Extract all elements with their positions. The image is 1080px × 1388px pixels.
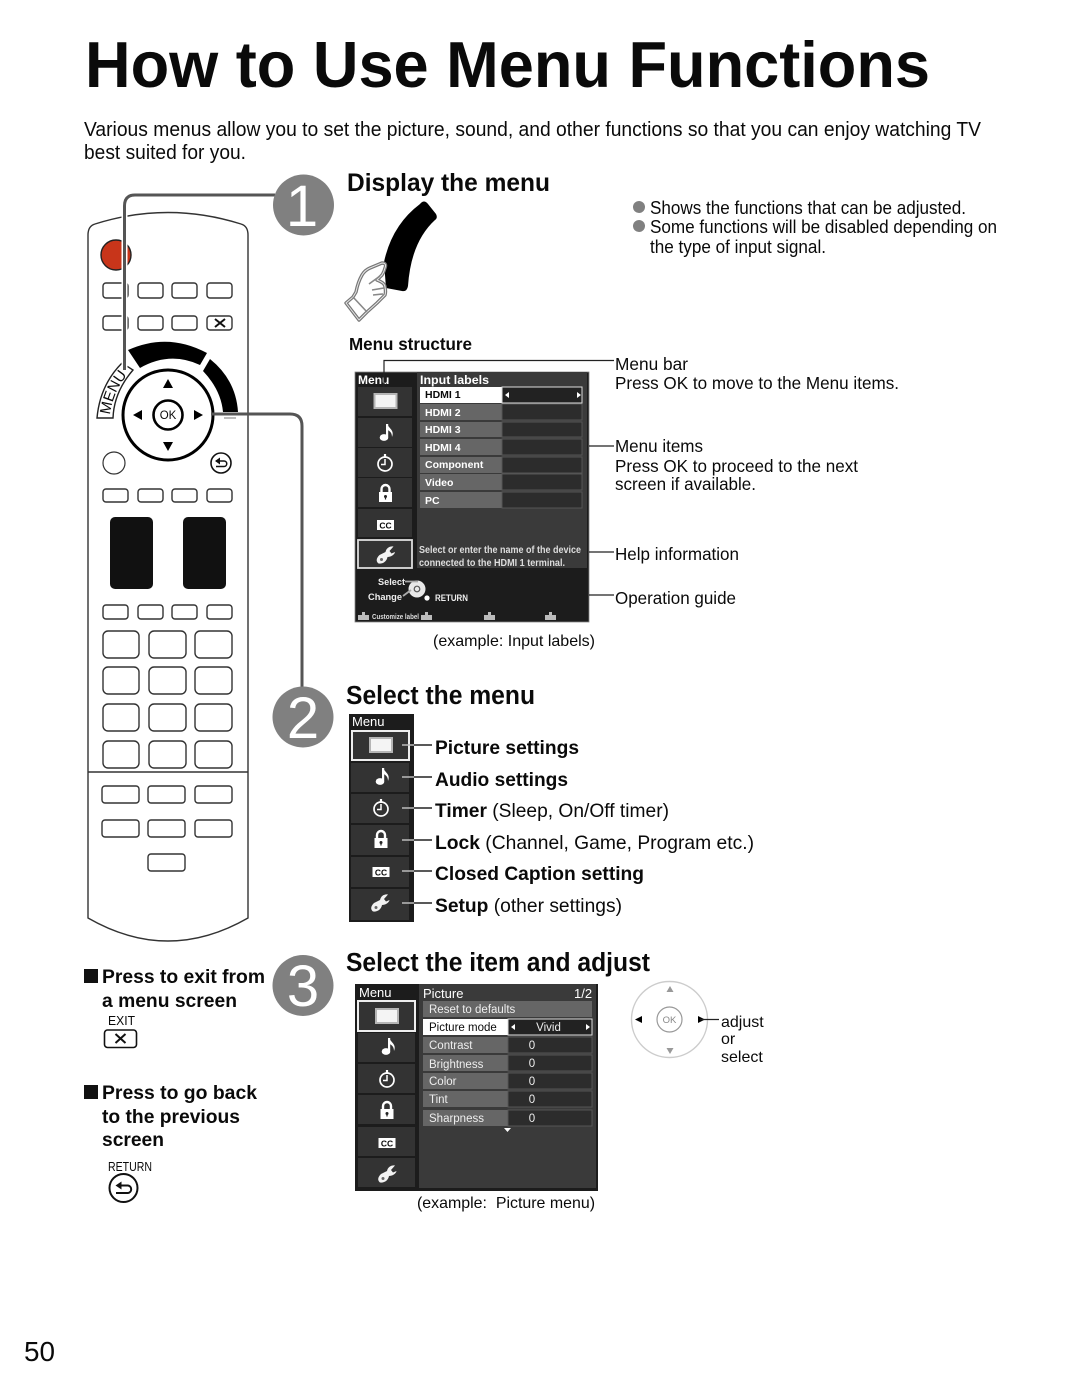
screen labels: Select or enter the name of the device <box>419 545 581 556</box>
leader lines <box>384 360 614 595</box>
exit note: a menu screen <box>102 990 237 1012</box>
operation guide icons <box>358 580 556 620</box>
menu label: MENU <box>100 370 125 414</box>
menu bar label: Press OK to move to the Menu items. <box>615 373 899 393</box>
help information label: Help information <box>615 544 739 564</box>
picture menu rows: Reset to defaults <box>429 1004 516 1016</box>
menu screen: picture <box>355 984 598 1191</box>
title: How to Use Menu Functions <box>85 28 930 101</box>
picture menu rows: 0 <box>529 1076 535 1088</box>
menu bar label <box>615 354 899 393</box>
screen labels: Change <box>368 592 402 603</box>
input rows: HDMI 3 <box>425 424 461 436</box>
arrow: step 1 to menu button <box>124 195 275 370</box>
intro text <box>84 119 982 164</box>
page number: 50 <box>24 1336 55 1367</box>
exit note <box>84 966 265 1048</box>
remote control <box>87 212 249 942</box>
picture menu rows: 0 <box>529 1113 535 1125</box>
picture menu header <box>359 985 592 1001</box>
menu bar icons: CC <box>379 520 392 530</box>
return note: to the previous <box>102 1106 240 1128</box>
icon: exit button <box>104 1030 136 1048</box>
picture menu rows: Tint <box>429 1094 449 1106</box>
picture menu rows: Sharpness <box>429 1113 484 1125</box>
picture menu header: Picture <box>423 986 463 1001</box>
input rows: Component <box>425 459 484 471</box>
remote body <box>88 212 248 941</box>
top buttons <box>103 283 232 330</box>
icon: return button <box>110 1174 138 1202</box>
return button <box>211 453 231 473</box>
adjust or select label <box>721 1014 764 1066</box>
picture menu rows: 0 <box>529 1040 535 1052</box>
step 3 badge <box>272 954 334 1019</box>
black arc buttons <box>128 342 238 412</box>
menu items label: screen if available. <box>615 474 756 494</box>
menu bar label: Menu bar <box>615 354 688 374</box>
picture menu rows: 0 <box>529 1058 535 1070</box>
screen labels <box>358 373 581 621</box>
return note: screen <box>102 1129 164 1151</box>
menu bar strip: Menu <box>352 714 385 729</box>
menu category list: Lock (Channel, Game, Program etc.) <box>435 832 754 854</box>
picture menu rows: Picture mode <box>429 1022 497 1034</box>
menu category leaders <box>402 745 432 903</box>
input rows: Video <box>425 477 453 489</box>
input rows: HDMI 1 <box>425 389 461 401</box>
return note: Press to go back <box>102 1082 257 1104</box>
menu category list: Audio settings <box>435 769 568 791</box>
heading: display the menu: Display the menu <box>347 169 550 197</box>
picture menu rows: Color <box>429 1076 457 1088</box>
button row <box>103 489 232 502</box>
caption: picture menu example: (example: Picture menu) <box>417 1195 595 1212</box>
small round button <box>103 452 125 474</box>
input rows: PC <box>425 495 440 507</box>
step 2 badge: 2 <box>287 686 319 751</box>
menu category list: Timer (Sleep, On/Off timer) <box>435 800 669 822</box>
bullet notes: Some functions will be disabled depending on <box>650 217 997 237</box>
power button <box>101 240 131 270</box>
step 2 badge <box>272 686 334 751</box>
menu category list <box>435 737 754 917</box>
screen labels: Menu <box>358 373 389 387</box>
picture menu icons: CC <box>381 1138 393 1148</box>
picture menu rows: Brightness <box>429 1059 484 1071</box>
black rocker buttons <box>110 517 226 589</box>
adjust or select label: select <box>721 1049 763 1066</box>
menu bar icons <box>358 387 412 568</box>
menu category list: Picture settings <box>435 737 579 759</box>
screen labels: Input labels <box>420 373 489 387</box>
menu items label <box>615 436 858 494</box>
directional pad <box>123 370 213 460</box>
lower button rows <box>102 605 232 871</box>
operation guide label: Operation guide <box>615 588 736 608</box>
picture menu icons <box>358 1001 415 1187</box>
menu items label: Menu items <box>615 436 703 456</box>
menu category list: Closed Caption setting <box>435 863 644 885</box>
icon: faded directional pad: OK <box>663 1015 677 1026</box>
screen labels: Select <box>378 577 406 588</box>
arrow: step 2 to directional pad <box>211 414 302 690</box>
input rows <box>420 387 582 508</box>
heading: select the item and adjust: Select the item and adjust <box>346 949 650 977</box>
intro text: Various menus allow you to set the picture, sound, and other functions so that you can enjoy watching TV <box>84 119 982 141</box>
bullet notes <box>633 198 997 257</box>
input rows: HDMI 2 <box>425 407 461 419</box>
menu category list: Setup (other settings) <box>435 895 622 917</box>
picture menu rows: Contrast <box>429 1040 473 1052</box>
return note <box>84 1082 257 1202</box>
heading: menu structure: Menu structure <box>349 334 472 354</box>
directional pad: OK <box>160 410 177 422</box>
picture menu header: 1/2 <box>574 986 592 1001</box>
step 3 badge: 3 <box>287 954 319 1019</box>
adjust or select label: or <box>721 1031 736 1048</box>
icon: pointing hand <box>346 263 386 320</box>
icon: faded directional pad <box>632 982 719 1058</box>
intro text: best suited for you. <box>84 142 246 164</box>
menu bar strip: CC <box>375 868 387 878</box>
screen labels: RETURN <box>435 593 468 604</box>
heading: select the menu: Select the menu <box>346 682 535 710</box>
menu items label: Press OK to proceed to the next <box>615 456 858 476</box>
screen labels: Customize label <box>372 614 419 621</box>
icon: black menu button swoosh <box>384 202 437 291</box>
exit note: Press to exit from <box>102 966 265 988</box>
menu screen: input labels <box>355 372 589 622</box>
picture menu header: Menu <box>359 985 392 1000</box>
screen labels: connected to the HDMI 1 terminal. <box>419 558 565 569</box>
picture menu rows <box>423 1001 592 1132</box>
bullet notes: Shows the functions that can be adjusted. <box>650 198 966 218</box>
return note: RETURN <box>108 1159 152 1174</box>
picture menu rows: 0 <box>529 1094 535 1106</box>
bullet notes: the type of input signal. <box>650 237 826 257</box>
input rows: HDMI 4 <box>425 442 461 454</box>
picture menu rows: Vivid <box>536 1022 561 1034</box>
exit x mark <box>215 319 225 327</box>
step 1 badge <box>273 174 334 239</box>
menu bar strip <box>349 714 414 922</box>
caption: input labels example: (example: Input labels) <box>433 633 595 650</box>
step 1 badge: 1 <box>286 174 318 239</box>
exit note: EXIT <box>108 1013 135 1028</box>
adjust or select label: adjust <box>721 1014 764 1031</box>
